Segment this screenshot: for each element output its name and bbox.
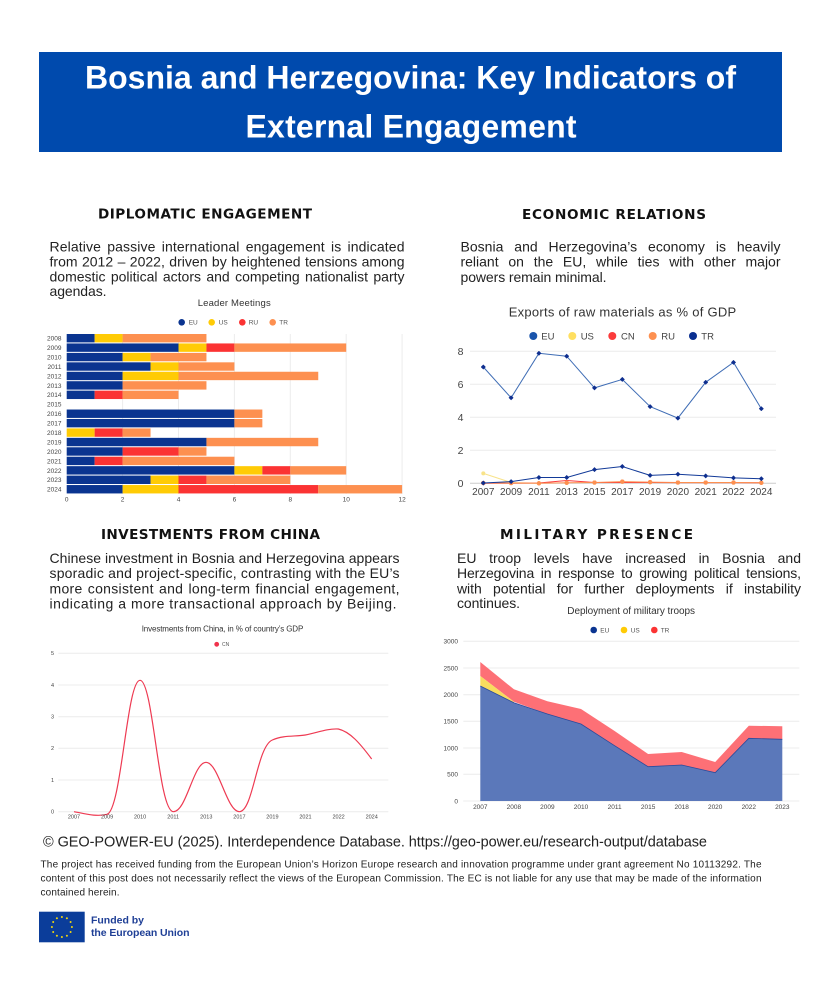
text block: diplomatic engagement: from 2012 – 2022, driven by heightened tensions among bbox=[50, 254, 404, 270]
year axis: 2022 bbox=[722, 487, 745, 498]
series: TR bbox=[480, 662, 782, 773]
year axis: 2020 bbox=[708, 804, 723, 811]
year axis: 2009 bbox=[540, 804, 555, 811]
icon: EU flag bbox=[39, 912, 85, 942]
value axis: 2500 bbox=[444, 665, 458, 672]
year axis: 2010 bbox=[574, 804, 589, 811]
value axis: 4 bbox=[458, 412, 464, 424]
year labels: 2016 bbox=[47, 411, 62, 418]
text block: economic relations: powers remain minimal. bbox=[460, 269, 606, 285]
legend: CN bbox=[621, 331, 635, 342]
text block: military presence: with potential for further deployments if instability bbox=[456, 580, 801, 596]
heading: diplomatic engagement: DIPLOMATIC ENGAGEMENT bbox=[98, 206, 313, 222]
chart title: Leader Meetings bbox=[198, 298, 271, 309]
value axis: 5 bbox=[51, 651, 54, 657]
year labels: 2019 bbox=[47, 440, 62, 446]
legend: US bbox=[581, 331, 594, 342]
year axis: 2019 bbox=[266, 815, 279, 821]
year axis: 2024 bbox=[366, 815, 378, 821]
year axis bbox=[68, 815, 378, 821]
text block: economic relations: Bosnia and Herzegovina’s economy is heavily bbox=[460, 238, 780, 254]
year labels: 2014 bbox=[47, 392, 62, 399]
year axis: 2011 bbox=[528, 487, 550, 498]
year axis: 2021 bbox=[695, 487, 717, 498]
year labels: 2023 bbox=[47, 477, 62, 484]
year axis: 2007 bbox=[473, 804, 488, 811]
text block: diplomatic engagement: Relative passive international engagement is indicated bbox=[50, 238, 404, 254]
series: EU bbox=[480, 686, 782, 801]
value axis: 6 bbox=[233, 496, 237, 504]
value axis bbox=[444, 639, 458, 805]
year axis: 2013 bbox=[556, 487, 578, 498]
chart title: Investments from China, in % of country’s GDP bbox=[142, 625, 303, 634]
panel: military presence bbox=[444, 527, 801, 811]
value axis: 2 bbox=[458, 445, 464, 457]
value axis bbox=[51, 651, 54, 816]
text block: investments from china: more consistent and long-term financial engagement, bbox=[50, 580, 400, 596]
text block: military presence: Herzegovina in response to growing political tensions, bbox=[457, 565, 801, 581]
funding disclaimer: content of this post does not necessarily reflect the views of the European Commission. The EC is not liable for any use that may be made of the information bbox=[40, 874, 762, 884]
value axis: 3 bbox=[51, 715, 54, 721]
text block: investments from china bbox=[50, 550, 400, 612]
value axis: 12 bbox=[398, 496, 406, 504]
value axis: 4 bbox=[177, 496, 181, 504]
funding disclaimer: The project has received funding from the European Union’s Horizon Europe research and innovation programme under grant agreement No 10113292. The bbox=[40, 860, 762, 870]
year axis: 2021 bbox=[299, 815, 312, 821]
legend: TR bbox=[279, 320, 288, 327]
value axis bbox=[65, 496, 406, 504]
value axis: 2000 bbox=[444, 692, 458, 699]
year axis: 2022 bbox=[742, 804, 756, 811]
text block: diplomatic engagement: agendas. bbox=[50, 283, 106, 299]
series: CN bbox=[483, 480, 761, 483]
title banner bbox=[39, 52, 782, 152]
legend bbox=[529, 331, 714, 342]
source line: © GEO-POWER-EU (2025). Interdependence Database. https://geo-power.eu/research-output/database bbox=[43, 834, 707, 850]
year labels: 2018 bbox=[47, 430, 62, 437]
value axis: 8 bbox=[458, 346, 464, 358]
funded by label: Funded by bbox=[91, 914, 144, 926]
heading: military presence: MILITARY PRESENCE bbox=[500, 527, 693, 543]
area chart: deployment of military troops bbox=[444, 606, 799, 811]
line chart: investments from china bbox=[51, 625, 388, 821]
title banner: Bosnia and Herzegovina: Key Indicators of bbox=[85, 60, 736, 96]
year labels: 2017 bbox=[47, 421, 62, 428]
funding disclaimer: contained herein. bbox=[40, 888, 120, 898]
series: CN bbox=[74, 680, 372, 815]
text block: military presence bbox=[456, 550, 801, 611]
value axis: 0 bbox=[454, 798, 458, 805]
text block: military presence: continues. bbox=[457, 595, 520, 611]
value axis: 4 bbox=[51, 683, 54, 689]
value axis: 3000 bbox=[444, 639, 458, 646]
series: US bbox=[480, 676, 514, 703]
legend: EU bbox=[541, 331, 555, 342]
year labels bbox=[47, 336, 62, 494]
year labels: 2012 bbox=[47, 373, 62, 380]
value axis: 1 bbox=[51, 778, 54, 784]
legend: EU bbox=[600, 627, 610, 634]
value axis: 8 bbox=[288, 496, 292, 504]
value axis: 2 bbox=[121, 496, 125, 504]
panel: investments from china bbox=[50, 527, 400, 821]
year axis: 2015 bbox=[641, 804, 656, 811]
value axis: 2 bbox=[51, 746, 54, 752]
year axis: 2007 bbox=[68, 815, 80, 821]
year axis: 2011 bbox=[167, 815, 179, 821]
year labels: 2011 bbox=[48, 364, 62, 371]
year labels: 2013 bbox=[47, 383, 62, 390]
panel: diplomatic engagement bbox=[47, 206, 406, 504]
year axis: 2017 bbox=[233, 815, 246, 821]
value axis: 0 bbox=[51, 810, 54, 816]
line chart: exports of raw materials bbox=[458, 305, 776, 498]
year labels: 2021 bbox=[47, 458, 62, 465]
year axis bbox=[473, 804, 790, 811]
year axis: 2024 bbox=[750, 487, 773, 498]
text block: economic relations bbox=[460, 238, 781, 285]
value axis: 10 bbox=[343, 496, 350, 504]
year axis: 2017 bbox=[611, 487, 634, 498]
funded by label: the European Union bbox=[91, 927, 190, 939]
year axis bbox=[472, 487, 773, 498]
year axis: 2009 bbox=[500, 487, 523, 498]
legend: US bbox=[219, 320, 228, 327]
heading: economic relations: ECONOMIC RELATIONS bbox=[522, 207, 706, 223]
year axis: 2009 bbox=[101, 815, 113, 821]
value axis: 1000 bbox=[444, 745, 458, 752]
year labels: 2022 bbox=[47, 468, 62, 475]
year labels: 2010 bbox=[47, 354, 62, 362]
year axis: 2015 bbox=[583, 487, 606, 498]
year labels: 2024 bbox=[47, 487, 62, 494]
legend: TR bbox=[661, 627, 670, 634]
series: EU bbox=[483, 353, 761, 418]
panel: economic relations bbox=[458, 207, 781, 498]
text block: investments from china: sporadic and project-specific, contrasting with the EU’s bbox=[50, 565, 400, 581]
text block: diplomatic engagement bbox=[50, 238, 404, 299]
year axis: 2013 bbox=[200, 815, 212, 821]
value axis bbox=[458, 346, 464, 490]
title banner: External Engagement bbox=[246, 108, 577, 144]
year axis: 2010 bbox=[134, 815, 146, 821]
text block: economic relations: reliant on the EU, while ties with other major bbox=[460, 254, 781, 270]
chart title: Deployment of military troops bbox=[567, 606, 695, 617]
series: US bbox=[483, 473, 539, 483]
legend bbox=[590, 627, 670, 634]
text block: investments from china: indicating a more transactional approach by Beijing. bbox=[50, 596, 396, 612]
value axis: 6 bbox=[458, 379, 464, 391]
series: RU bbox=[483, 482, 761, 483]
legend: TR bbox=[701, 331, 714, 342]
value axis: 1500 bbox=[444, 719, 458, 726]
legend: RU bbox=[249, 320, 258, 327]
text block: diplomatic engagement: domestic political actors and competing nationalist party bbox=[50, 268, 404, 284]
year axis: 2007 bbox=[472, 487, 495, 498]
value axis: 0 bbox=[458, 478, 464, 490]
legend bbox=[178, 319, 288, 327]
year axis: 2022 bbox=[332, 815, 345, 821]
year labels: 2020 bbox=[47, 449, 62, 456]
stacked bars bbox=[67, 334, 402, 493]
year labels: 2015 bbox=[47, 402, 62, 409]
year axis: 2018 bbox=[674, 804, 689, 811]
text block: investments from china: Chinese investment in Bosnia and Herzegovina appears bbox=[50, 550, 400, 566]
legend: CN bbox=[222, 642, 230, 648]
year axis: 2011 bbox=[608, 804, 622, 811]
bar chart: leader meetings bbox=[47, 298, 406, 504]
funded by label bbox=[91, 914, 190, 939]
funding disclaimer bbox=[40, 860, 762, 898]
legend: RU bbox=[661, 331, 675, 342]
year axis: 2008 bbox=[507, 804, 522, 811]
series: TR bbox=[483, 466, 761, 483]
chart title: Exports of raw materials as % of GDP bbox=[509, 305, 736, 320]
value axis: 500 bbox=[447, 772, 458, 779]
legend: EU bbox=[189, 320, 198, 327]
year axis: 2023 bbox=[775, 804, 790, 811]
legend: US bbox=[631, 627, 640, 634]
year labels: 2008 bbox=[47, 336, 62, 343]
year labels: 2009 bbox=[47, 345, 62, 352]
legend bbox=[214, 642, 230, 648]
year axis: 2019 bbox=[639, 487, 662, 498]
heading: investments from china: INVESTMENTS FROM CHINA bbox=[101, 527, 320, 543]
value axis: 0 bbox=[65, 496, 69, 504]
text block: military presence: EU troop levels have increased in Bosnia and bbox=[457, 550, 801, 566]
year axis: 2020 bbox=[667, 487, 689, 498]
